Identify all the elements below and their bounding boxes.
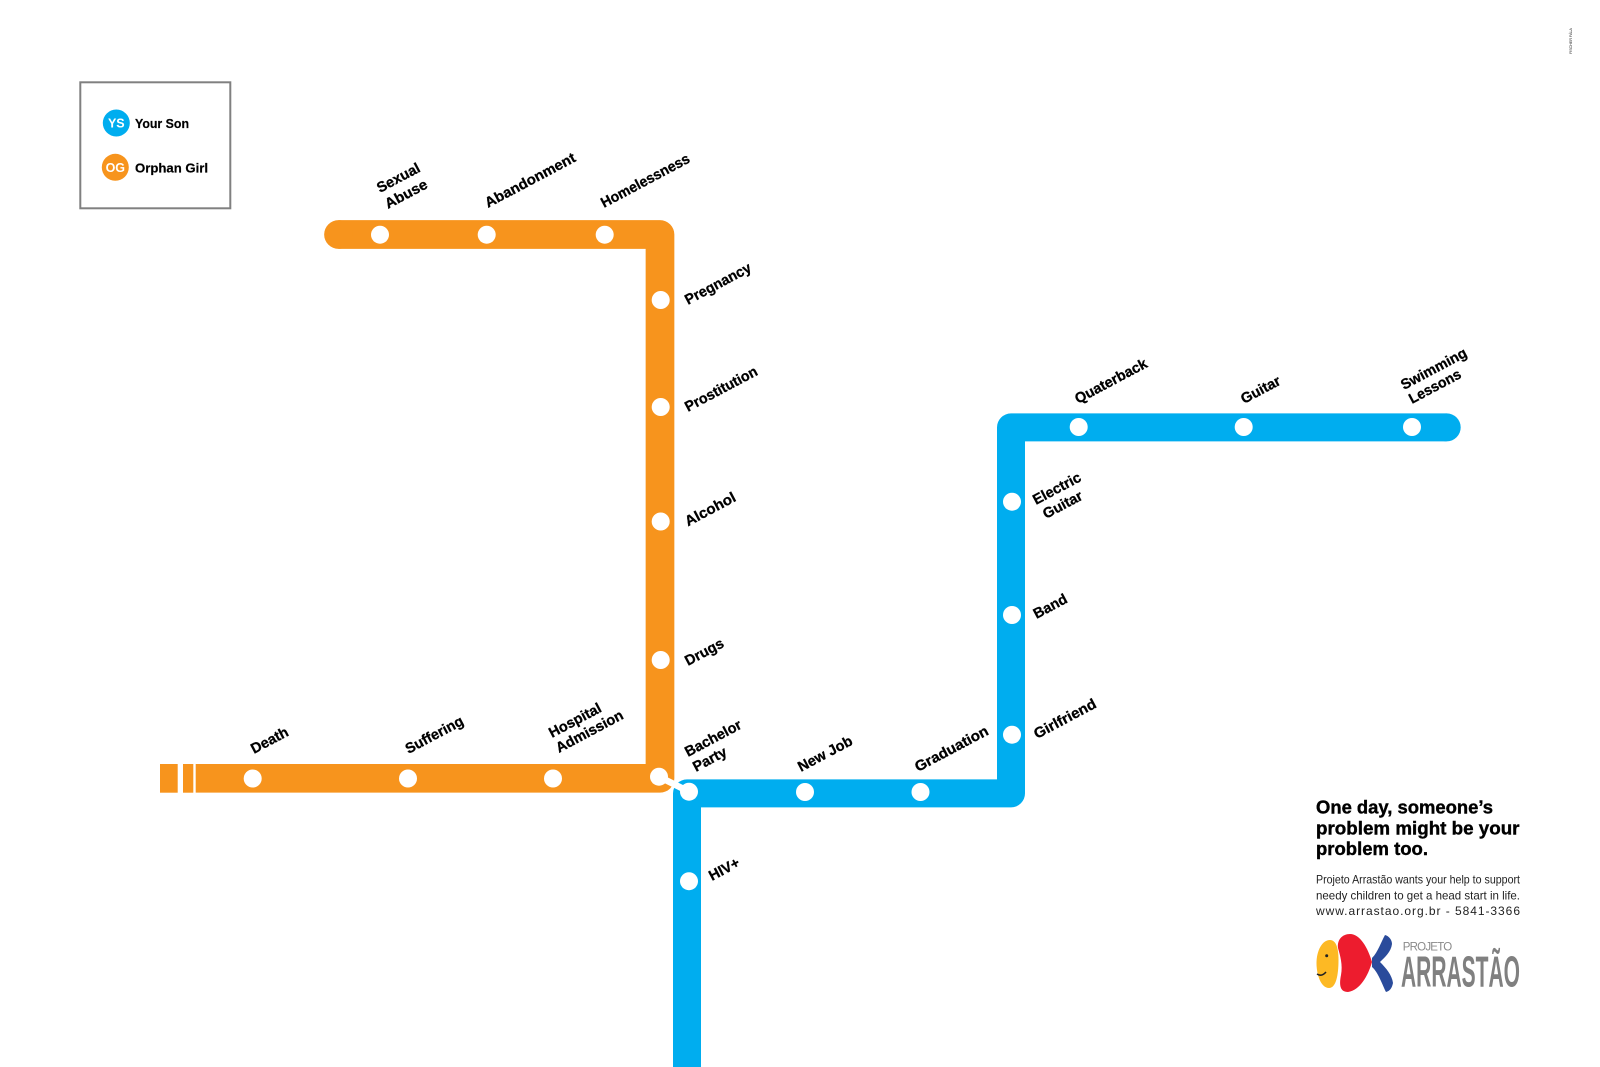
blue line stops	[680, 418, 1421, 890]
legend: Orphan Girl: OG	[106, 161, 125, 175]
legend: Orphan Girl	[102, 154, 208, 181]
station labels: orange line: Pregnancy	[682, 260, 754, 309]
legend panel	[80, 82, 230, 208]
logo wordmark: PROJETO	[1403, 942, 1452, 954]
headline: One day, someone’s	[1316, 796, 1493, 817]
station labels: orange line: Homelessness	[598, 151, 693, 212]
station labels: blue line: Quaterback	[1072, 356, 1151, 408]
legend: Your Son: YS	[108, 116, 125, 130]
station labels: blue line: Party	[690, 744, 730, 776]
station labels: blue line	[682, 345, 1470, 885]
body text	[1315, 872, 1521, 918]
station labels: blue line: Lessons	[1406, 367, 1464, 408]
credit: tiny vertical text: FISCHER FÁLA	[1568, 28, 1573, 54]
body text: www.arrastao.org.br - 5841-3366	[1315, 904, 1520, 918]
station labels: blue line: Band	[1031, 591, 1070, 623]
logo: Projeto Arrastão	[1316, 934, 1520, 997]
station labels: orange line: Abuse	[382, 177, 430, 213]
station labels: orange line: Sexual	[374, 160, 423, 197]
legend: Your Son	[103, 110, 189, 136]
station labels: blue line: Guitar	[1238, 373, 1284, 408]
station labels: orange line: Death	[248, 724, 291, 758]
station labels: orange line: Abandonment	[482, 150, 579, 212]
station labels: orange line: Hospital	[546, 701, 604, 742]
station labels: blue line: Swimming	[1398, 345, 1470, 394]
logo wordmark	[1401, 942, 1520, 997]
station labels: blue line: Graduation	[912, 723, 991, 776]
icon: fish logo	[1316, 934, 1393, 992]
station labels: blue line: Girlfriend	[1031, 696, 1099, 743]
body text: Projeto Arrastão wants your help to support	[1316, 872, 1521, 886]
orange line stops	[244, 226, 670, 787]
station labels: orange line: Admission	[553, 708, 626, 757]
orange line: Orphan Girl route	[160, 220, 660, 793]
station labels: orange line: Suffering	[403, 714, 467, 758]
station labels: blue line: Guitar	[1040, 488, 1086, 523]
interchange: Bachelor Party link between the lines	[650, 768, 698, 801]
station labels: blue line: Electric	[1030, 470, 1084, 509]
station labels: orange line: Alcohol	[682, 490, 739, 530]
headline: problem too.	[1316, 838, 1428, 859]
station labels: blue line: HIV+	[706, 855, 743, 885]
station labels: blue line: New Job	[795, 733, 856, 776]
headline: problem might be your	[1316, 817, 1520, 838]
blue line: Your Son route	[687, 413, 1461, 1067]
legend: Orphan Girl: Orphan Girl	[135, 160, 208, 175]
body text: needy children to get a head start in life.	[1316, 888, 1520, 902]
station labels: orange line	[248, 150, 761, 758]
station labels: blue line: Bachelor	[682, 717, 745, 761]
station labels: orange line: Prostitution	[682, 364, 761, 416]
legend: Your Son: Your Son	[135, 116, 189, 131]
station labels: orange line: Drugs	[682, 636, 727, 670]
headline	[1316, 796, 1520, 859]
